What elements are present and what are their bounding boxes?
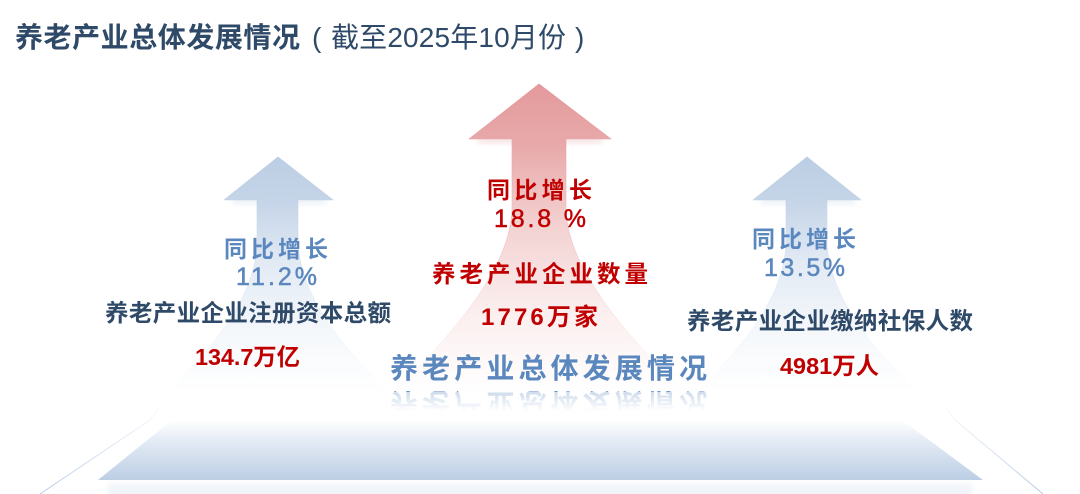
- right heading: growth: 同比增长: [752, 226, 856, 252]
- title: 养老产业总体发展情况: [15, 22, 300, 53]
- caption reflection: 养老产业总体发展情况: [390, 388, 707, 419]
- right label: 养老产业企业缴纳社保人数: [687, 308, 974, 334]
- centre heading: growth: 同比增长: [487, 177, 592, 203]
- left heading: growth: 同比增长: [224, 236, 328, 262]
- right blue arrow: [696, 157, 918, 392]
- right value: 4981万人: [780, 353, 879, 379]
- title: [15, 22, 584, 53]
- centre heading: growth: [487, 177, 592, 233]
- centre red arrow: [393, 84, 685, 392]
- title: ): [575, 22, 584, 53]
- platform outline: [40, 400, 1043, 494]
- centre caption: 养老产业总体发展情况: [390, 353, 707, 384]
- left blue arrow: [167, 157, 389, 392]
- right heading: growth: [752, 226, 856, 282]
- title: 截至2025年10月份: [331, 22, 566, 53]
- centre heading: growth: 18.8 %: [494, 205, 586, 233]
- left label: 养老产业企业注册资本总额: [105, 300, 392, 326]
- right heading: growth: 13.5%: [764, 254, 845, 282]
- left heading: growth: 11.2%: [236, 263, 317, 291]
- platform base: [98, 420, 983, 480]
- left value: 134.7万亿: [195, 344, 300, 370]
- left heading: growth: [224, 236, 328, 291]
- centre value: 1776万家: [481, 304, 598, 331]
- centre label: 养老产业企业数量: [432, 261, 648, 287]
- title: (: [312, 22, 322, 53]
- platform shadow: [108, 484, 972, 494]
